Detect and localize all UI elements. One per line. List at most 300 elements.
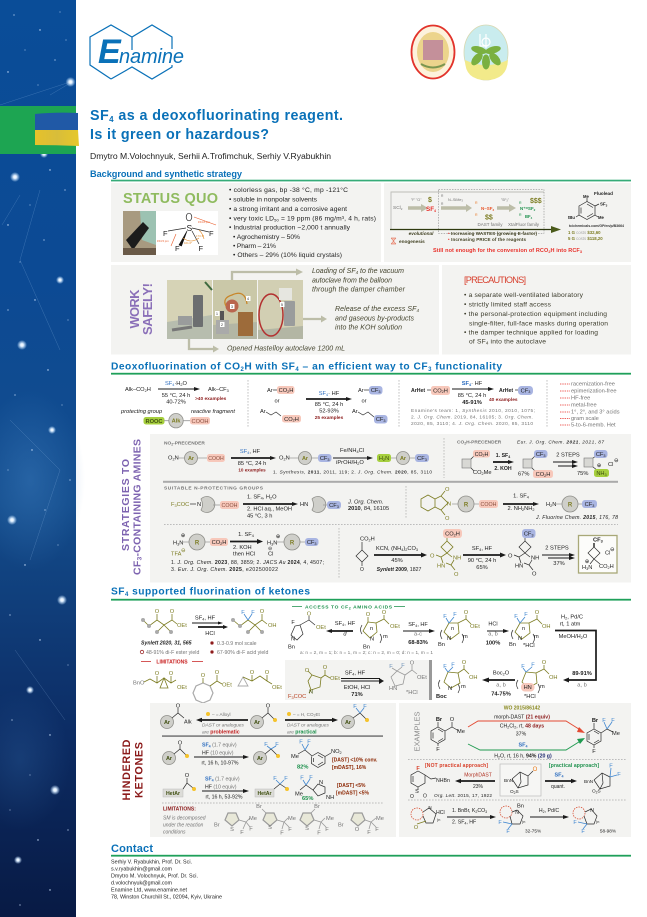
reaction: ketoester fluorination: [140, 609, 277, 656]
precautions list: 4: [486, 340, 489, 346]
building block diagram: COOH: [191, 419, 209, 425]
spiro CF3 intermediate: HN: [515, 564, 523, 570]
compound chain: difluoro amino acids: OEt: [316, 625, 326, 631]
limitations: substrates: O: [201, 673, 206, 679]
aryl ketone reaction: Ar: [257, 756, 264, 762]
access to CF2 amino acids caption: 2: [349, 606, 351, 610]
advantages list: 5-to-6-memb. Het: [571, 422, 616, 428]
general reaction scheme: Ar: [164, 720, 171, 726]
strategy: NO2 precender: O: [279, 456, 283, 462]
difluoro acid N-Boc: OH: [469, 675, 478, 681]
patent route: F: [611, 718, 615, 724]
strategy: spiro hydantoin route: 4: [401, 548, 403, 552]
strategy: phthalimide: O: [445, 487, 450, 493]
general reaction scheme: – = H, CO: [293, 712, 314, 717]
difluoro acid N-Bn: [509, 610, 551, 649]
strategy: NO2 precender: Cl: [359, 448, 364, 454]
heteroaryl ketone reaction: F: [273, 776, 277, 782]
compound chain: difluoro amino acids: d: [343, 632, 347, 638]
examples heading: EXAMPLES: [412, 712, 422, 752]
limitations: substrates: [133, 660, 282, 703]
reaction: heteroaryl acids: 4: [469, 383, 472, 387]
conclusion: 3: [580, 250, 582, 254]
example: nitrophenyl product: F: [307, 740, 311, 746]
building block diagram: protecting group: [120, 409, 162, 415]
strategy: phthalimide: [421, 487, 618, 522]
spirocyclic route: , Pd/C: [545, 808, 559, 814]
SF4 price: $: [428, 197, 432, 204]
panel: reagent evolution: SF: [426, 206, 434, 213]
reaction: aryl and cinnamic acids: CF: [376, 417, 383, 423]
bicyclic ketone comparison: F: [416, 766, 420, 772]
contact details: 78, Winston Churchill St., 02094, Kyiv, Ukraine: [111, 895, 222, 901]
spirocyclic route: 3: [485, 810, 487, 814]
compound chain: difluoro amino acids: 2: [581, 636, 583, 640]
strategy: TFA amine salts: R: [195, 540, 200, 546]
final amino acid: Cl: [605, 550, 610, 556]
SF4 molecular structure: 173.1°: [196, 234, 204, 238]
strategy: spiro hydantoin route: 4: [479, 548, 481, 552]
difluoro ester: n: [451, 626, 454, 632]
reaction: aryl and cinnamic acids: 85 °C, 24 h: [315, 402, 343, 408]
reaction: alkyl carboxylic acids: Alk–CO: [125, 387, 145, 393]
note: loading: autoclave from the balloon: [312, 278, 392, 284]
panel: N-trifluoroacetyl route: [285, 660, 432, 700]
panel: N-trifluoroacetyl route: 71%: [351, 692, 363, 698]
strategy: spiro hydantoin route: Synlett 2009, 1827: [377, 567, 421, 573]
difluoro acid free amine: [516, 660, 558, 700]
difluoro ester: OEt: [470, 624, 480, 630]
limitations: thiophenes: Br: [338, 822, 344, 828]
strategy: TFA amine salts: Cl: [268, 552, 273, 558]
panel: precautions: [442, 265, 631, 354]
limitations: substrates: O: [265, 670, 270, 676]
reaction: aryl and cinnamic acids: 3: [383, 419, 386, 423]
difluoro acid free amine: OH: [549, 675, 558, 681]
property list: • Industrial production ~2,000 t annually: [229, 224, 351, 232]
reaction: ketoester fluorination: 4: [202, 617, 204, 621]
Enamine references: 2020, 85, 3110; 4. J. Org. Chem. 2020, 85, 3110: [411, 421, 533, 427]
limitations: thiophenes: O: [355, 827, 360, 833]
spiro acid intermediate: H: [456, 532, 460, 538]
bicyclic gem-difluoride: F: [617, 772, 621, 778]
heteroaryl ketone reaction: HetAr: [166, 791, 180, 797]
difluoro acid N-Boc: Boc: [436, 694, 447, 700]
final amino acid: CO: [599, 564, 608, 570]
access to CF2 amino acids caption: [292, 604, 405, 610]
note: release: into the KOH solution: [335, 324, 402, 332]
example: nitrophenyl product: 82%: [297, 764, 308, 770]
reaction: aryl and cinnamic acids: 4: [326, 393, 328, 397]
strategy: N-protecting groups: [164, 486, 389, 520]
arrow: to loading note: [232, 268, 303, 280]
panel: reagent evolution: "SF: [501, 198, 506, 202]
example: nitrophenyl product: Me: [291, 754, 299, 760]
strategy: N-protecting groups: COC: [177, 502, 189, 508]
compound chain: difluoro amino acids: rt, 1 atm: [560, 622, 581, 628]
strategy: CO2H precender: CO: [536, 472, 544, 478]
strategy: spiro hydantoin route: , HF: [481, 546, 493, 552]
heading: deoxofluorination: functionality: [432, 362, 502, 372]
patent route: Cl: [509, 724, 514, 730]
aryl ketone reaction: (1.7 equiv): [211, 742, 237, 748]
strategy: spiro hydantoin route: 2: [405, 548, 407, 552]
final amino acid: H: [610, 564, 614, 570]
limitations: thiophenes: F: [375, 827, 379, 833]
panel: hindered ketones: [150, 703, 396, 837]
strategy: TFA amine salts: then HCl: [233, 552, 255, 558]
strategy: spiro hydantoin route: 37%: [553, 561, 565, 567]
difluoro acid free amine: HN: [524, 685, 532, 691]
note: loading: Loading of SF: [312, 268, 356, 275]
strategy: spiro hydantoin route: H: [371, 536, 375, 542]
heading: strategies: 3: [137, 556, 144, 560]
compound chain: difluoro amino acids: [288, 610, 596, 700]
heading: strategies: -CONTAINING AMINES: [132, 439, 144, 557]
panel: reagent evolution: "F" "Cl": [411, 198, 421, 202]
strategy: TFA amine salts: CF: [307, 540, 314, 546]
access to CF2 amino acids caption: AMINO ACIDS: [351, 604, 393, 610]
emblem: institute of organic chemistry: [464, 25, 508, 80]
reaction: ketoester fluorination: , HF: [204, 616, 216, 622]
strategy: NO2 precender: NO: [164, 442, 171, 446]
general reaction scheme: [160, 704, 369, 736]
patent route: O: [450, 717, 455, 723]
heading: ketones: supported fluorination of ketones: [129, 586, 310, 598]
spiro CF3 intermediate: O: [508, 554, 513, 560]
bracketed ketoester a-c: [360, 610, 400, 650]
strategy: phthalimide: 3: [592, 504, 594, 508]
strategy: N-protecting groups: 2. HCl aq., MeOH: [247, 506, 292, 512]
photo: loading setup: [213, 280, 257, 339]
strategy: CO2H precender: H-PRECENDER: [466, 440, 502, 446]
patent route: Br: [592, 718, 599, 724]
patent route: Me: [612, 731, 620, 737]
panel: reagent evolution: 3: [506, 200, 508, 203]
note: loading: 4: [356, 270, 359, 275]
bicyclic ketone comparison: O: [423, 794, 427, 800]
Fluolead: 1 G costs $32,60: [568, 230, 601, 235]
green band with Ukrainian flag: [0, 106, 79, 154]
difluoro ester: N: [447, 636, 451, 642]
note: autoclave: Opened Hastelloy autoclave 1200 mL: [227, 346, 345, 352]
strategy: NO2 precender: COOH: [208, 456, 224, 462]
bicyclic ketone comparison: Org. Lett. 2015, 17, 1922: [434, 793, 492, 798]
strategy: CO2H precender: CO: [473, 470, 482, 476]
general reaction scheme: O: [176, 704, 181, 710]
DAST family: R: [475, 201, 478, 205]
reaction: ketoester fluorination: F: [241, 610, 245, 616]
strategy: CO2H precender: 1. SF: [496, 453, 508, 459]
strategy: CO2H precender: 67%: [518, 472, 529, 478]
limitations: thiophenes: SM is decomposed: [163, 816, 206, 822]
strategy: TFA amine salts: [171, 532, 324, 573]
property list: • Others – 29% (10% liquid crystals): [233, 252, 342, 259]
difluoro acid free amine: F: [531, 662, 535, 668]
limitations: substrates: OEt: [222, 682, 232, 688]
N-benzyl spirocyclic difluoride: )n: [522, 820, 525, 824]
bicyclic gem-difluoride: [584, 764, 621, 794]
difluoro acid free amine: m: [540, 684, 545, 690]
panel: reagent evolution: $$: [485, 214, 493, 222]
reaction: aryl and cinnamic acids: Ar: [358, 388, 364, 394]
heteroaryl ketone reaction: rt, 16 h, 53-92%: [206, 794, 243, 800]
general reaction scheme: F: [353, 704, 357, 710]
title: 4: [109, 115, 114, 124]
reaction: aryl and cinnamic acids: or: [361, 398, 367, 404]
strategy: TFA amine salts: 2. KOH: [233, 545, 252, 551]
reaction: aryl and cinnamic acids: H: [295, 417, 299, 423]
patent route: F: [602, 718, 606, 724]
strategy: TFA amine salts: 3: [177, 542, 179, 546]
panel: reagent evolution: [384, 183, 631, 262]
building block diagram: Alk: [172, 418, 181, 424]
strategy: CO2H precender: CF: [536, 452, 543, 458]
panel: reagent evolution: R: [519, 213, 522, 217]
work safely heading: [127, 283, 155, 335]
panel: N-trifluoroacetyl route: HN: [389, 686, 397, 692]
final amino acid: CF: [593, 538, 601, 544]
bicyclic starting ketone: S: [516, 789, 519, 794]
SF4 molecular structure: S: [186, 223, 192, 233]
final amino acid: 3: [586, 567, 588, 571]
panel: N-trifluoroacetyl route: F: [389, 664, 393, 670]
general reaction scheme: Ar: [254, 720, 261, 726]
patent route: Br: [436, 717, 443, 723]
difluoro acid N-Bn: n: [522, 626, 525, 632]
heading: deoxofluorination: 3: [428, 367, 432, 373]
general reaction scheme: are problematic: [202, 730, 240, 736]
aryl ketone reaction: Ar: [166, 756, 173, 762]
spiro acid intermediate: NH: [453, 556, 461, 562]
reaction: aryl and cinnamic acids: H: [289, 388, 293, 394]
compound chain: difluoro amino acids: a-c: [414, 632, 422, 638]
limitations: thiophenes: conditions: [163, 830, 186, 836]
spirocyclic route: O: [414, 825, 419, 831]
strategy: NO2 precender: 2: [283, 457, 286, 461]
panel: reagent evolution: 4: [531, 216, 533, 220]
strategy: NO2 precender: 85 °C, 24 h: [238, 461, 266, 467]
compound chain: difluoro amino acids: 4: [342, 623, 344, 627]
advantages list: gram scale: [571, 416, 599, 422]
patent route: H: [494, 754, 498, 760]
reaction: ketoester fluorination: O: [155, 609, 160, 615]
strategy: N-protecting groups: F: [171, 502, 174, 508]
reaction: heteroaryl acids: ArHet: [499, 388, 513, 394]
patent route: WO 2015/86142: [504, 706, 540, 712]
reaction: ketoester fluorination: O: [260, 609, 265, 615]
Enamine references: 2. J. Org. Chem. 2019, 84, 16105; 3. Org. Chem.: [411, 414, 533, 420]
timeline arrow: [390, 228, 553, 230]
title: Is it green or hazardous?: [90, 127, 269, 143]
reaction: heteroaryl acids: 40 examples: [489, 397, 518, 403]
panel: examples: [399, 703, 631, 837]
strategy: TFA amine salts: N: [273, 540, 277, 546]
strategy: N-protecting groups: 4: [261, 496, 263, 500]
example: imidazole product: 65%: [302, 796, 313, 802]
strategy: spiro hydantoin route: 3: [416, 548, 418, 552]
general reaction scheme: Ar: [345, 720, 352, 726]
example: nitrophenyl product: F: [299, 740, 303, 746]
reaction: heteroaryl acids: SF: [462, 381, 472, 387]
difluoro acid N-Bn: m: [534, 634, 539, 640]
strategy: N-protecting groups: HN: [300, 502, 308, 508]
reaction: alkyl carboxylic acids: ·H: [174, 381, 180, 387]
bicyclic ketone comparison: S: [415, 789, 419, 795]
reaction: aryl and cinnamic acids: CF: [371, 388, 378, 394]
N-benzyl spirocyclic difluoride: F: [506, 829, 510, 835]
panel: N-trifluoroacetyl route: F: [401, 663, 405, 669]
aryl ketone reaction: F: [275, 742, 279, 748]
difluoro acid N-Bn: O: [535, 610, 540, 616]
aryl ketone reaction: [DAST] <10% conv.: [332, 758, 378, 764]
panel: N-trifluoroacetyl route: O: [410, 660, 415, 666]
SCl2 step: 2: [401, 207, 403, 211]
strategy: phthalimide: NH: [524, 506, 532, 512]
Fluolead: Me: [583, 194, 589, 199]
spirocyclic route: [411, 804, 616, 835]
heading: deoxofluorination: – an efficient way to CF: [299, 362, 428, 372]
panel: reagent evolution: • Increasing PRICE of the reagents: [448, 237, 526, 242]
panel: reagent evolution: N⁺=SF: [520, 206, 534, 211]
strategy: CO2H precender: H: [546, 472, 550, 478]
strategy: N-protecting groups: 3: [337, 505, 339, 509]
compound chain: difluoro amino acids: O: [307, 612, 312, 618]
panel: N-trifluoroacetyl route: 3: [291, 696, 294, 700]
strategy: NO2 precender: CF: [417, 456, 425, 462]
patent route: morph-DAST (21 equiv): [494, 714, 550, 720]
panel: N-trifluoroacetyl route: N: [309, 690, 313, 696]
aryl ketone reaction: [mDAST], 16%: [332, 765, 367, 771]
panel: reagent evolution: XtalFluor family: [508, 222, 540, 227]
Fluolead: Fluolead: [594, 191, 613, 196]
strategy: NO2 precender: O: [168, 456, 172, 462]
heading: strategies: STRATEGIES TO: [120, 459, 132, 551]
general reaction scheme: DAST or analogues: [287, 722, 329, 728]
spirocyclic route: 2: [475, 810, 477, 814]
precautions list: • a separate well-ventilated laboratory: [464, 292, 584, 299]
limitations: substrates: O: [215, 670, 220, 676]
strategy: CO2H precender: 75%: [577, 471, 588, 477]
logo: Enamine: [90, 25, 186, 79]
contact details: Enamine Ltd, www.enamine.net: [111, 888, 188, 894]
property list: • Agrochemistry – 50%: [233, 234, 300, 241]
example: nitrophenyl product: NO: [331, 749, 340, 755]
access to CF2 amino acids caption: ACCESS TO CF: [305, 606, 348, 610]
patent route: 4: [526, 744, 528, 748]
panel: N-trifluoroacetyl route: 4: [352, 672, 354, 676]
conclusion: H into RCF: [551, 248, 580, 254]
SCl2 step: SCl: [393, 206, 401, 211]
bracketed ketoester a-c: O: [366, 612, 371, 618]
limitations: thiophenes: Br: [256, 804, 262, 810]
bracketed ketoester a-c: Bn: [363, 644, 370, 650]
Fluolead: 5 G costs $118,20: [568, 236, 603, 241]
strategy: TFA amine salts: 2: [220, 542, 222, 546]
strategy: NO2 precender: 2: [357, 462, 359, 466]
strategy: phthalimide: R: [464, 502, 469, 508]
strategy: N-protecting groups: 3: [174, 504, 177, 508]
compound chain: difluoro amino acids: , HF: [344, 621, 356, 627]
difluoro acid N-Boc: [436, 660, 478, 700]
reaction: heteroaryl acids: 3: [528, 390, 530, 394]
reaction: alkyl carboxylic acids: 40-72%: [166, 400, 186, 406]
spiro acid intermediate: CO: [445, 532, 454, 538]
panel: reagent evolution: 4: [434, 209, 436, 213]
Fluolead: tBu: [568, 215, 575, 220]
price notes: • Increasing WASTES (growing E-factor): [448, 231, 538, 236]
bracketed ketoester a-c: OEt: [390, 624, 400, 630]
strategy: NO2 precender: N: [385, 456, 389, 462]
panel: status quo: [111, 183, 381, 262]
bicyclic ketone comparison: [NOT practical approach]: [425, 763, 488, 769]
heteroaryl ketone reaction: HetAr: [257, 791, 272, 797]
heading: deoxofluorination: 2: [241, 367, 245, 373]
spiro CF3 intermediate: 3: [531, 533, 534, 537]
strategy: N-protecting groups: , H: [263, 494, 270, 500]
panel: reagent evolution: DAST family: [478, 222, 503, 227]
precautions list: • the personal-protection equipment including: [464, 311, 607, 318]
strategy: spiro hydantoin route: 45%: [391, 558, 403, 564]
strategy: phthalimide: R: [568, 502, 573, 508]
difluoro ester: m: [463, 634, 468, 640]
property list: [229, 186, 376, 259]
heading: strategies: [120, 439, 144, 575]
difluoro acid N-Bn: N: [518, 636, 522, 642]
difluoro ester: Bn: [438, 642, 445, 648]
heteroaryl ketone reaction: O: [185, 773, 190, 779]
final amino acid: ⊕: [585, 559, 590, 565]
panel: N-trifluoroacetyl route: O: [323, 665, 328, 671]
compound chain: difluoro amino acids: SF: [408, 622, 415, 628]
heading: hindered ketones: [121, 739, 146, 800]
compound chain: difluoro amino acids: a, b: [496, 682, 506, 688]
strategy: phthalimide: CF: [585, 502, 592, 508]
Fluolead: [568, 191, 624, 241]
strategy: N-protecting groups: O: [272, 494, 277, 500]
panel: N-trifluoroacetyl route: OEt: [330, 676, 340, 682]
reaction: alkyl carboxylic acids: H: [147, 387, 151, 393]
general reaction scheme: – = Alloyl: [212, 712, 231, 717]
limitations: substrates: LIMITATIONS: [156, 660, 188, 666]
patent route: SF: [518, 742, 526, 748]
bicyclic gem-difluoride: BnN: [584, 779, 593, 784]
SF4 molecular structure: F: [175, 244, 180, 253]
evolution frame: [391, 192, 544, 229]
spiro acid intermediate: 2: [454, 533, 456, 537]
SF4 molecular structure: F: [163, 229, 168, 238]
bicyclic starting ketone: 2: [514, 791, 516, 795]
strategy: NO2 precender: H: [379, 456, 383, 462]
note: release: and gaseous by-products: [335, 316, 414, 322]
patent route: 37%: [516, 732, 527, 738]
reaction: alkyl carboxylic acids: >40 examples: [195, 396, 227, 402]
strategy: phthalimide: 4: [527, 495, 529, 499]
patent route: , rt,: [516, 724, 525, 730]
strategy: CO2H precender: 3: [605, 473, 607, 477]
final amino acid: H: [582, 565, 586, 571]
heading: hindered ketones: KETONES: [134, 742, 146, 798]
reaction: aryl and cinnamic acids: 25 examples: [315, 415, 344, 421]
strategy: NO2 precender: 2: [171, 442, 173, 446]
strategy: phthalimide: 2: [532, 508, 535, 512]
difluoro acid free amine: *HCl: [524, 694, 536, 700]
N-benzyl spirocyclic difluoride: 32-75%: [525, 828, 541, 834]
reaction: aryl and cinnamic acids: 3: [378, 390, 381, 394]
strategy: NO2 precender: 4: [356, 450, 359, 454]
aryl ketone reaction: O: [178, 740, 183, 746]
panel: reagent evolution: $$$: [530, 198, 542, 205]
